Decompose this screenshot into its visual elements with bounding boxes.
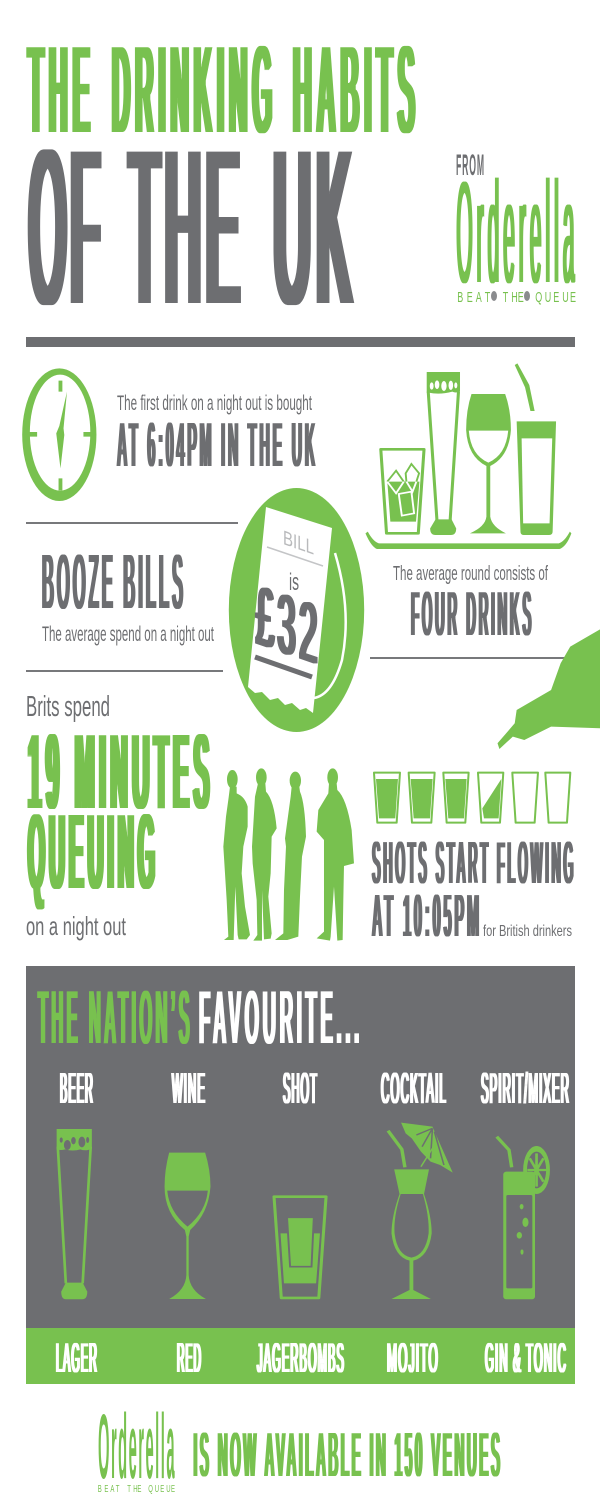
favourite drink names (56, 1334, 567, 1381)
drink category labels: WINE (172, 1064, 206, 1113)
icon: four drinks on a tray (365, 363, 571, 549)
drink category labels (60, 1064, 570, 1113)
footer: Orderella (98, 1396, 176, 1498)
icon: bill on a plate: £32 (256, 568, 321, 684)
heading: booze bills (42, 537, 214, 646)
icon: bottle pouring (498, 629, 600, 749)
footer: BEAT THE QUEUE (98, 1484, 175, 1494)
panel heading (38, 973, 363, 1061)
logo: Orderella: BEAT THE QUEUE (457, 289, 576, 306)
text: shots start flowing (372, 829, 576, 951)
icon: bill on a plate: BILL (283, 527, 314, 560)
text: first drink: The first drink on a night out is bought (117, 392, 312, 415)
favourite drink names: RED (177, 1334, 202, 1381)
title: THE (28, 18, 95, 162)
icons: favourite drinks (57, 1123, 550, 1299)
heading: booze bills: The average spend on a night out (42, 623, 214, 646)
icon: people queuing (223, 768, 354, 941)
favourite drink names: JAGERBOMBS (257, 1334, 345, 1381)
icon: bill on a plate: is (289, 569, 299, 596)
text: four drinks (393, 563, 548, 650)
text: queuing (26, 691, 214, 941)
icon: bill on a plate (229, 488, 364, 732)
logo: Orderella: FROM (456, 149, 485, 182)
drink category labels: SHOT (283, 1064, 318, 1113)
header rule (26, 337, 575, 347)
text: queuing: on a night out (26, 911, 126, 941)
icon: clock (22, 368, 96, 501)
drink category labels: BEER (60, 1064, 94, 1113)
title (28, 18, 420, 350)
favourite drink names: LAGER (56, 1334, 98, 1381)
icon: shot glasses (374, 773, 570, 823)
text: first drink (117, 392, 318, 481)
panel: the nation's favourite (26, 966, 575, 1384)
text: queuing: Brits spend (26, 691, 110, 723)
title: OF (30, 104, 104, 350)
favourite drink names: MOJITO (387, 1334, 439, 1381)
